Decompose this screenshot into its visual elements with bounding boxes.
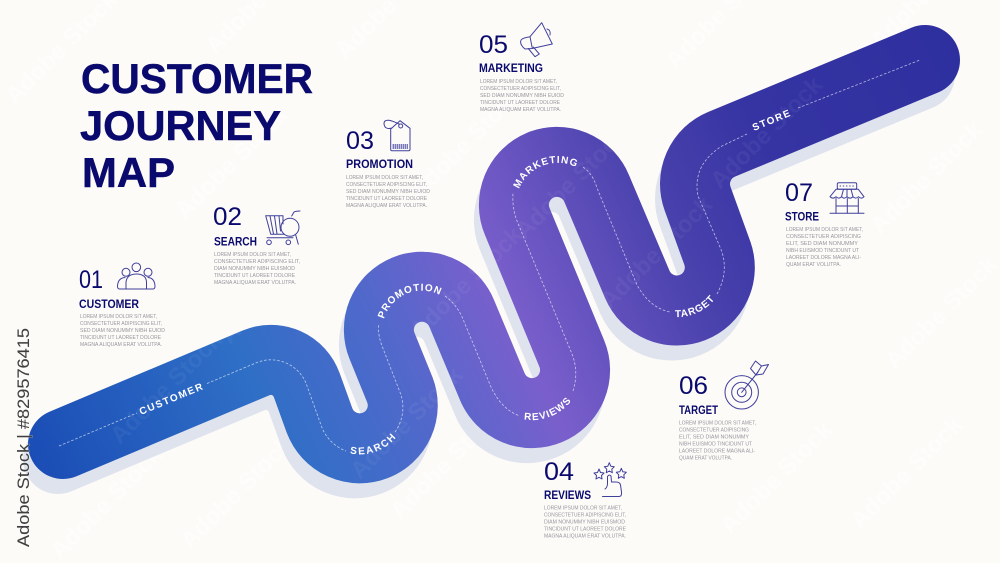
step 07: store: NIBH EUISMOD TINCIDUNT UT <box>786 248 860 254</box>
icon: megaphone <box>521 23 552 57</box>
step 03: promotion: CONSECTETUER ADIPISCING ELIT, <box>346 182 427 188</box>
step 01: customer: CUSTOMER <box>79 297 139 311</box>
step 03: promotion <box>346 120 430 209</box>
step 07: store: QUAM ERAT VOLUTPA. <box>786 262 841 268</box>
step 01: customer: SED DIAM NONUMMY NIBH EUIOD <box>80 328 165 334</box>
icon: price tag <box>384 120 410 151</box>
title: JOURNEY <box>80 102 281 149</box>
text: Adobe Stock <box>510 121 633 244</box>
step 05: marketing <box>479 23 564 113</box>
road labels: TARGET <box>674 294 714 318</box>
icon: people group <box>118 263 155 289</box>
step 02: search: TINCIDUNT UT LAOREET DOLORE <box>214 273 296 279</box>
step 06: target: ELIT, SED DIAM NONUMMY <box>679 435 750 441</box>
road labels: MARKETING <box>513 156 578 188</box>
step 01: customer: CONSECTETUER ADIPISCING ELIT, <box>80 321 162 327</box>
road labels <box>138 108 793 454</box>
step 06: target: NIBH EUISMOD TINCIDUNT UT <box>679 442 753 448</box>
step 02: search: MAGNA ALIQUAM ERAT VOLUTPA. <box>214 280 296 286</box>
step 04: reviews <box>544 458 627 540</box>
step 05: marketing: TINCIDUNT UT LAOREET DOLORE <box>480 100 561 106</box>
step 03: promotion: SED DIAM NONUMMY NIBH EUIOD <box>346 189 430 195</box>
text: Adobe Stock <box>345 361 468 484</box>
icon: shopping cart with magnifier <box>266 211 300 245</box>
step 02: search: SEARCH <box>214 235 257 249</box>
icon: storefront <box>830 183 864 213</box>
step 06: target: LOREM IPSUM DOLOR SIT AMET, <box>679 421 756 427</box>
step 03: promotion: PROMOTION <box>346 157 413 171</box>
step 04: reviews: REVIEWS <box>544 488 591 502</box>
step 05: marketing: LOREM IPSUM DOLOR SIT AMET, <box>480 79 557 85</box>
text: Adobe Stock <box>45 441 168 563</box>
step 02: search <box>213 203 300 286</box>
step 06: target: LAOREET DOLORE MAGNA ALI- <box>679 449 755 455</box>
step 06: target <box>679 361 768 462</box>
text: Adobe Stock <box>865 116 988 239</box>
title: MAP <box>82 149 175 196</box>
text: Adobe Stock <box>405 81 528 204</box>
step 02: search: 02 <box>213 203 242 231</box>
title <box>80 55 313 196</box>
icon: target with arrow <box>725 361 768 409</box>
road labels: STORE <box>751 108 793 134</box>
step 01: customer: TINCIDUNT UT LAOREET DOLORE <box>80 335 162 341</box>
step 01: customer: 01 <box>79 266 103 294</box>
step 04: reviews: DIAM NONUMMY NIBH EUISMOD <box>544 520 625 526</box>
step 06: target: CONSECTETUER ADIPISCING <box>679 428 749 434</box>
step 04: reviews: TINCIDUNT UT LAOREET DOLORE <box>544 526 627 532</box>
text: Adobe Stock <box>175 431 298 554</box>
text: Adobe Stock <box>215 226 338 349</box>
step 06: target: TARGET <box>679 403 719 417</box>
step 01: customer: MAGNA ALIQUAM ERAT VOLUTPA. <box>80 342 162 348</box>
road labels: PROMOTION <box>378 284 442 318</box>
step 06: target: QUAM ERAT VOLUTPA. <box>679 456 732 462</box>
winding journey road <box>59 60 925 451</box>
stock id side label: Adobe Stock | #829576415 <box>14 328 33 547</box>
text: Adobe Stock <box>170 101 293 224</box>
step 05: marketing: SED DIAM NONUMMY NIBH EUIOD <box>480 93 564 99</box>
road shadow <box>58 75 920 463</box>
step 02: search: DIAM NONUMMY NIBH EUISMOD <box>214 266 295 272</box>
step 07: store: STORE <box>785 210 819 224</box>
step 07: store: 07 <box>785 179 813 207</box>
step 01: customer: LOREM IPSUM DOLOR SIT AMET, <box>80 314 157 320</box>
step 02: search: LOREM IPSUM DOLOR SIT AMET, <box>214 252 291 258</box>
step 04: reviews: 04 <box>544 458 574 486</box>
step 02: search: CONSECTETUER ADIPISCING ELIT, <box>214 259 300 265</box>
step 01: customer <box>79 263 165 348</box>
step 05: marketing: CONSECTETUER ADIPISCING ELIT, <box>480 86 561 92</box>
icon: stars and thumbs up <box>594 463 626 496</box>
step 06: target: 06 <box>679 372 708 400</box>
text: Adobe Stock <box>405 221 528 344</box>
step 04: reviews: CONSECTETUER ADIPISCING ELIT, <box>544 512 626 518</box>
step 07: store: CONSECTETUER ADIPISCING <box>786 234 861 240</box>
step 07: store <box>785 179 864 268</box>
road labels: SEARCH <box>350 433 396 454</box>
text: Adobe Stock <box>715 416 838 539</box>
road labels: CUSTOMER <box>138 381 206 418</box>
road labels: REVIEWS <box>524 398 570 420</box>
title: CUSTOMER <box>81 55 313 102</box>
text: Adobe Stock <box>595 191 718 314</box>
step 03: promotion: 03 <box>346 127 374 155</box>
text: Adobe Stock <box>705 71 828 194</box>
step 05: marketing: 05 <box>479 31 508 59</box>
step 05: marketing: MAGNA ALIQUAM ERAT VOLUTPA. <box>480 107 561 113</box>
step 03: promotion: TINCIDUNT UT LAOREET DOLORE <box>346 196 428 202</box>
text: Adobe Stock <box>880 251 1000 374</box>
text: Adobe Stock <box>845 411 968 534</box>
text: Adobe Stock <box>105 326 228 449</box>
step 04: reviews: MAGNA ALIQUAM ERAT VOLUTPA. <box>544 534 626 540</box>
step 07: store: LAOREET DOLORE MAGNA ALI- <box>786 255 861 261</box>
step 07: store: LOREM IPSUM DOLOR SIT AMET, <box>786 227 863 233</box>
step 03: promotion: LOREM IPSUM DOLOR SIT AMET, <box>346 175 423 181</box>
step 03: promotion: MAGNA ALIQUAM ERAT VOLUTPA. <box>346 203 427 209</box>
text: Adobe Stock <box>385 401 508 524</box>
step 05: marketing: MARKETING <box>479 61 543 75</box>
step 07: store: ELIT, SED DIAM NONUMMY <box>786 241 859 247</box>
step 04: reviews: LOREM IPSUM DOLOR SIT AMET, <box>544 506 622 512</box>
